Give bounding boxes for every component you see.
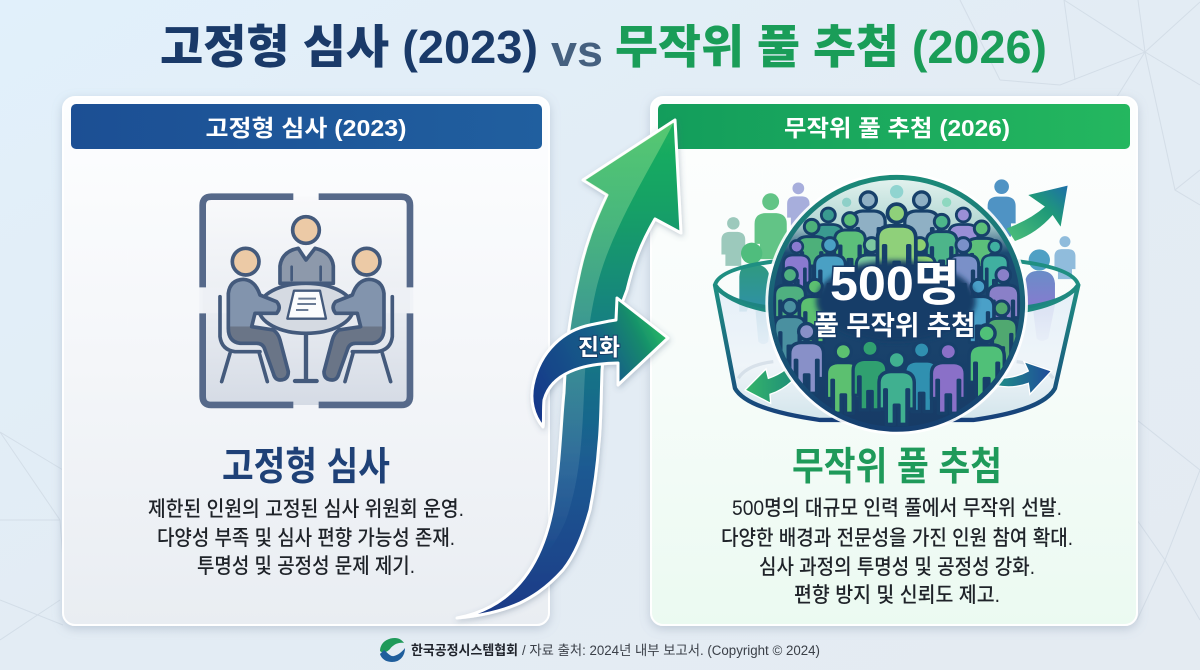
title: 고정형 심사 (2023)	[160, 21, 538, 73]
title: 무작위 풀 추첨 (2026)	[615, 21, 1047, 73]
arrow: circulation right	[996, 362, 1052, 394]
label: 500 people: 500명	[830, 258, 960, 311]
icon: committee around table	[199, 197, 413, 405]
body text: random pool: 다양한 배경과 전문성을 가진 인원 참여 확대.	[721, 527, 1073, 550]
header: fixed review: 고정형 심사 (2023)	[206, 115, 406, 141]
arrow: evolution	[457, 120, 681, 618]
body text: random pool: 500명의 대규모 인력 풀에서 무작위 선발.	[732, 497, 1062, 520]
header: random pool	[658, 104, 1130, 149]
title: vs	[551, 27, 603, 76]
label: evolution: 진화	[578, 334, 620, 360]
body text: fixed review	[148, 498, 464, 578]
pool circle with crowd	[765, 172, 1028, 435]
header: fixed review	[71, 104, 542, 149]
glass bowl	[715, 260, 1078, 420]
body text: fixed review: 투명성 및 공정성 문제 제기.	[197, 555, 415, 578]
body text: random pool: 심사 과정의 투명성 및 공정성 강화.	[759, 556, 1035, 579]
body text: fixed review: 다양성 부족 및 심사 편향 가능성 존재.	[157, 527, 455, 550]
source note: / 자료 출처: 2024년 내부 보고서. (Copyright © 2024)	[522, 643, 820, 658]
arrow: up-right growth	[1007, 186, 1068, 241]
icon: association logo	[380, 638, 405, 662]
right figure	[324, 248, 392, 382]
panel: random pool	[651, 97, 1137, 625]
title	[160, 21, 1047, 76]
illustration: 500 person pool	[715, 172, 1078, 435]
footer	[380, 638, 820, 662]
arrow: circulation left	[745, 369, 793, 403]
panel: fixed review	[63, 97, 549, 625]
body text: random pool: 편향 방지 및 신뢰도 제고.	[794, 584, 1000, 607]
long arrow	[457, 120, 681, 618]
people outside the pool	[721, 179, 1075, 344]
body text: fixed review: 제한된 인원의 고정된 심사 위원회 운영.	[148, 498, 464, 521]
body text: random pool	[721, 497, 1073, 607]
heading: fixed review: 고정형 심사	[222, 446, 390, 489]
label: pool random draw: 풀 무작위 추첨	[814, 311, 976, 341]
association name: 한국공정시스템협회	[411, 643, 518, 658]
left figure	[220, 248, 288, 382]
header: random pool: 무작위 풀 추첨 (2026)	[784, 115, 1010, 141]
short arrow	[532, 298, 668, 427]
heading: random pool: 무작위 풀 추첨	[792, 446, 1002, 489]
